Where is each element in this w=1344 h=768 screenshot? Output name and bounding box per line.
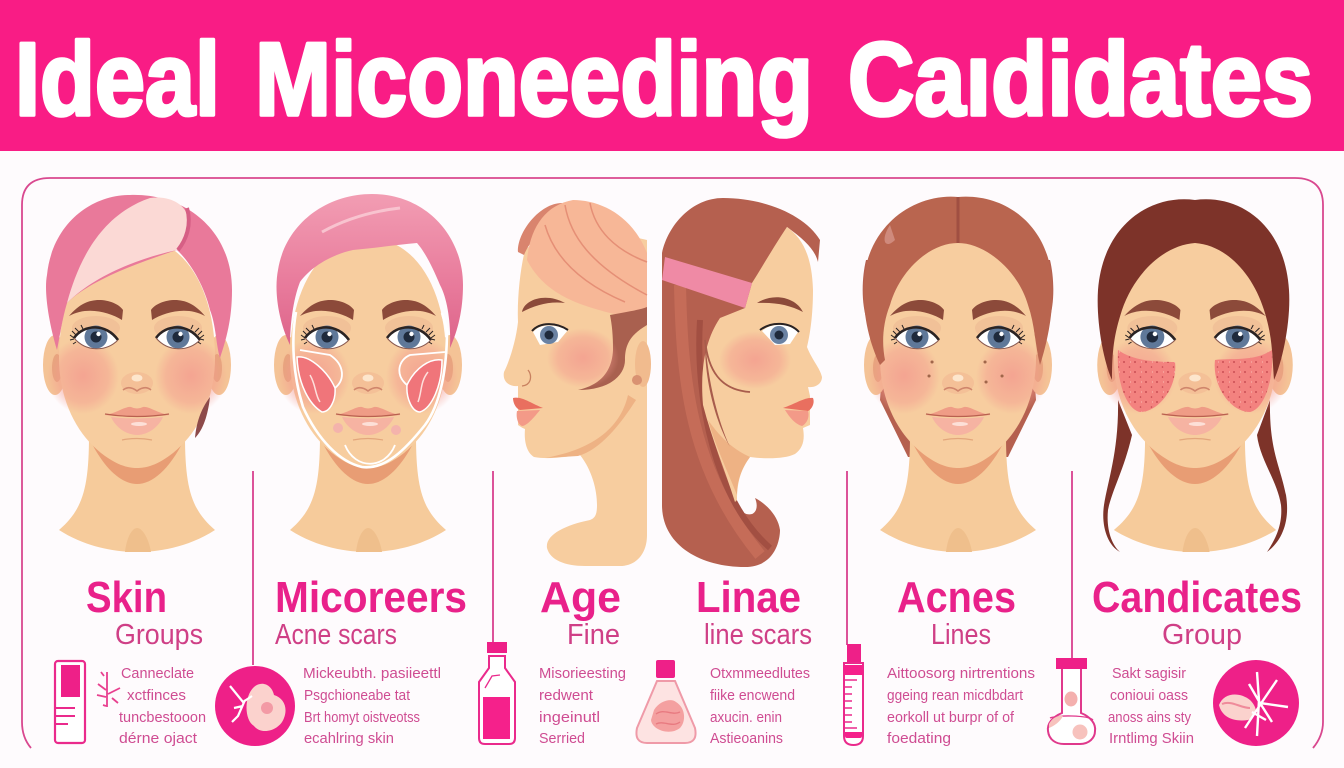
face 1: pink swoop hair (43, 195, 232, 552)
column 6 text: Candicates: conioui oass (1110, 687, 1188, 704)
column 2 text: Micoreers: Psgchioneabe tat (304, 687, 411, 704)
column 1 text: Skin: xctfinces (127, 687, 186, 704)
column 6 text: Candicates (1092, 573, 1302, 747)
column 2 text: Micoreers (275, 573, 467, 747)
column 5 text: Acnes: ggeing rean micdbdart (887, 687, 1024, 704)
title banner: Miconeeding (255, 22, 813, 138)
column 1 text: Skin: dérne ojact (119, 730, 198, 747)
column 4 text: Linae (696, 573, 812, 747)
column 3 text: Age: Serried (539, 730, 585, 747)
icon: product tube (55, 661, 85, 743)
column 5 text: Acnes (887, 573, 1035, 747)
hair band (662, 257, 752, 308)
column 2 text: Micoreers: Brt homyt oistveotss (304, 709, 420, 726)
column 1 text: Skin: tuncbestooon (119, 709, 206, 726)
column 1 text: Skin: Canneclate (121, 665, 194, 682)
column 4 text: Linae: axucin. enin (710, 709, 782, 726)
column 5 text: Acnes: Lines (931, 619, 991, 651)
column 4 text: Linae: Otxmmeedlutes (710, 665, 810, 682)
column 3 text: Age: Age (540, 573, 621, 622)
column 2 text: Micoreers: Micoreers (275, 573, 467, 622)
column 6 text: Candicates: Irntlimg Skiin (1109, 730, 1194, 747)
column 4 text: Linae: line scars (704, 619, 812, 651)
column 1 text: Skin (86, 573, 206, 747)
column 5 text: Acnes: Acnes (897, 573, 1016, 622)
icon: sparkle fragments (97, 672, 120, 707)
column 4 text: Linae: Astieoanins (710, 730, 783, 747)
column 6 text: Candicates: Candicates (1092, 573, 1302, 622)
icon: tissue flask (636, 660, 696, 743)
column 6 text: Candicates: anoss ains sty (1108, 709, 1191, 726)
face 2: acne scar map (274, 194, 463, 552)
face 6: dark hair with textured red cheeks (1097, 199, 1293, 552)
column 3 text: Age: ingeinutl (539, 709, 600, 726)
column 4 text: Linae: fiike encwend (710, 687, 795, 704)
face 3: left profile (504, 200, 651, 566)
column 2 text: Micoreers: ecahlring skin (304, 730, 394, 747)
column 3 text: Age: Fine (567, 619, 620, 651)
face 5: brown hair with freckles (863, 197, 1053, 552)
column 5 text: Acnes: foedating (887, 730, 951, 747)
icon: serum bottle (479, 642, 515, 744)
icon: test tube (844, 644, 863, 745)
column 2 text: Micoreers: Acne scars (275, 619, 397, 651)
column 5 text: Acnes: Aittoosorg nirtrentions (887, 665, 1035, 682)
column 3 text: Age: Misorieesting (539, 665, 626, 682)
icon: cracked skin circle (1213, 660, 1299, 746)
rounded frame (22, 178, 1323, 748)
column 1 text: Skin: Skin (86, 573, 167, 622)
column 3 text: Age: redwent (539, 687, 594, 704)
icon: skin tissue circle (215, 666, 295, 746)
title banner: Ideal (15, 22, 220, 138)
column 2 text: Micoreers: Mickeubth. pasiieettl (303, 665, 441, 682)
column 3 text: Age (539, 573, 626, 747)
icon: round flask (1048, 658, 1095, 744)
title banner (0, 0, 1344, 151)
column 5 text: Acnes: eorkoll ut burpr of of (887, 709, 1015, 726)
column 6 text: Candicates: Sakt sagisir (1112, 665, 1186, 682)
column 6 text: Candicates: Group (1162, 619, 1242, 651)
column 1 text: Skin: Groups (115, 619, 203, 651)
column 4 text: Linae: Linae (696, 573, 801, 622)
face 4: right profile with long hair and band (662, 198, 822, 567)
